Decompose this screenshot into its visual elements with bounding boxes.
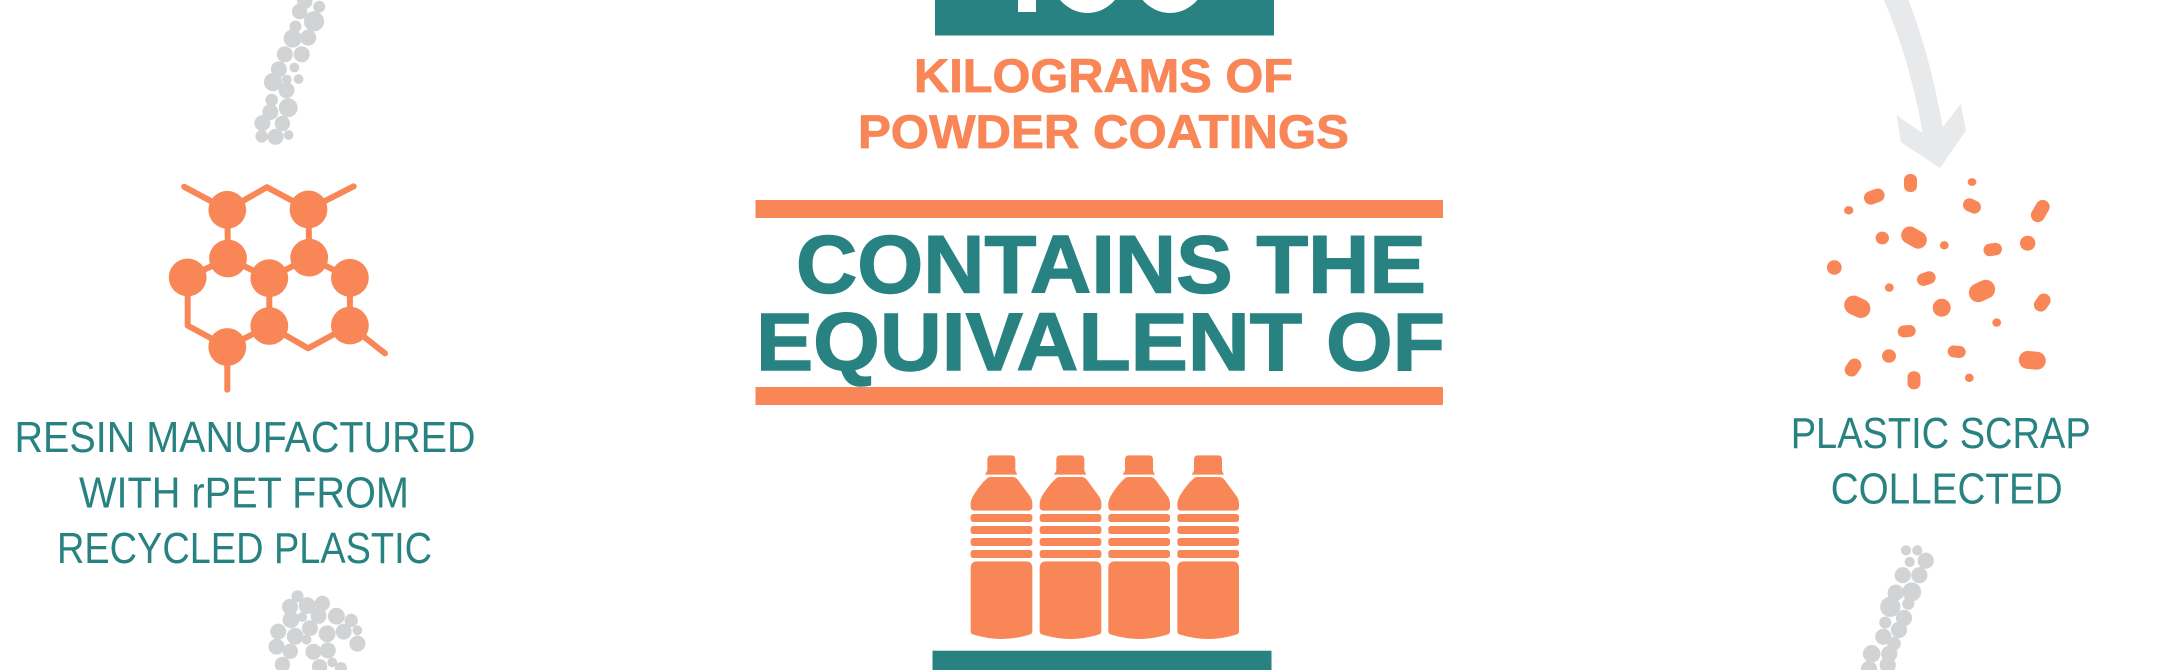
arrow: curved grey arrow down to plastic scrap <box>1884 0 1966 168</box>
text: resin manufactured caption: RECYCLED PLASTIC <box>57 524 432 573</box>
decorative dotted path: bottom right <box>1862 546 1933 670</box>
heading: contains the equivalent of text: CONTAINS THE <box>796 220 1426 311</box>
heading: kilograms of powder coatings: KILOGRAMS OF <box>914 49 1293 102</box>
text: plastic scrap collected caption <box>1791 409 2091 513</box>
text: resin manufactured caption: WITH rPET FROM <box>79 469 409 518</box>
text: resin manufactured caption <box>14 413 476 573</box>
text: plastic scrap collected caption: PLASTIC SCRAP <box>1791 409 2091 458</box>
panel: contains the equivalent of <box>756 200 1445 405</box>
icon: resin molecule <box>169 186 385 390</box>
text: resin manufactured caption: RESIN MANUFACTURED <box>14 413 476 462</box>
panel: top teal number block <box>935 0 1274 36</box>
panel: bottom teal number block <box>932 651 1272 670</box>
text: plastic scrap collected caption: COLLECTED <box>1831 464 2063 513</box>
heading: kilograms of powder coatings: POWDER COATINGS <box>858 105 1349 158</box>
heading: contains the equivalent of text <box>756 220 1445 388</box>
number: 100 kilograms (cropped at top) <box>1018 0 1198 13</box>
icon: scattered plastic scrap <box>1827 174 2053 389</box>
decorative dotted path: top left <box>255 0 324 144</box>
icon: four plastic bottles <box>971 455 1239 639</box>
heading: contains the equivalent of text: EQUIVALENT OF <box>756 297 1445 388</box>
decorative dotted path: bottom left <box>269 591 365 670</box>
heading: kilograms of powder coatings <box>858 49 1349 158</box>
